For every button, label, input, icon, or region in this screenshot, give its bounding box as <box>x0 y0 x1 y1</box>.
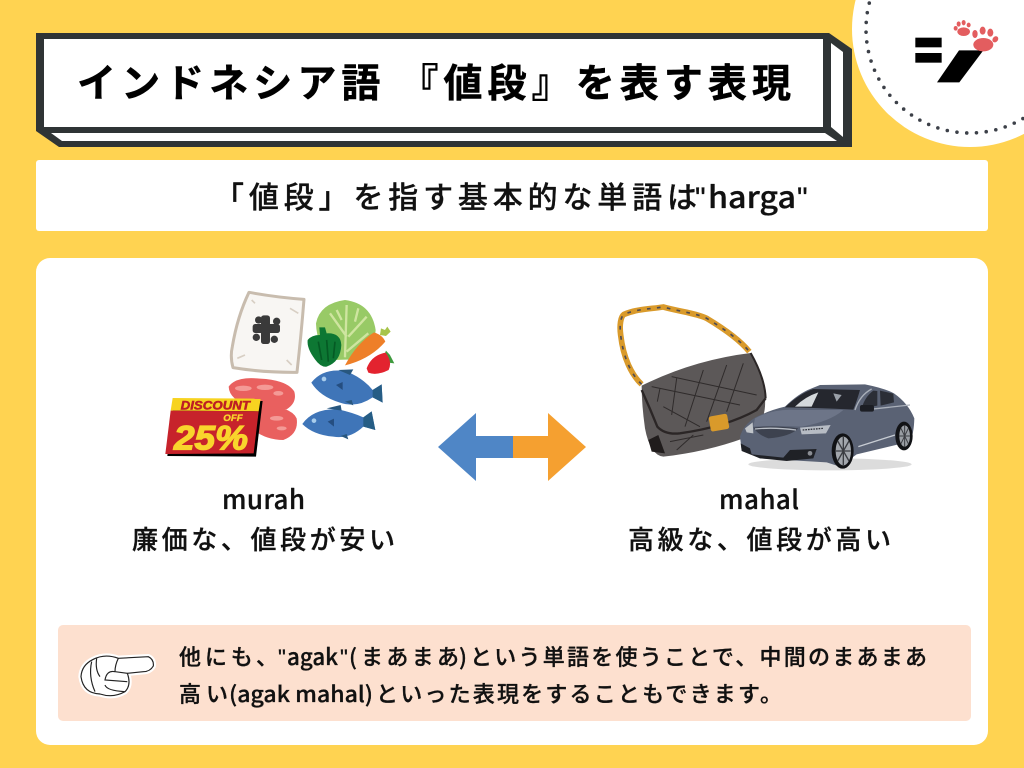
label: murah: murah <box>222 480 305 517</box>
icon: quilted handbag <box>642 353 766 457</box>
subtitle text: " <box>695 182 706 215</box>
icon: blue fish top <box>311 369 383 405</box>
icon: chain handle <box>620 307 749 384</box>
title frame <box>36 33 852 147</box>
note text: という単語を使うことで、中間のまあまあ <box>470 640 927 672</box>
icon: pointing hand <box>81 656 153 696</box>
illustration: luxury bag and car <box>620 307 914 470</box>
note text: といった表現をすることもできます。 <box>376 677 782 709</box>
illustration: cheap groceries with discount <box>165 292 394 457</box>
icon: rice bag <box>231 292 304 372</box>
icon: grey sedan <box>740 384 914 470</box>
note text <box>179 638 927 709</box>
icon: discount badge <box>165 398 263 457</box>
icon: green pepper <box>308 327 341 367</box>
note text: まあまあ <box>361 640 459 672</box>
arrow: murah versus mahal <box>438 413 586 481</box>
label: mahal <box>628 480 891 557</box>
icon: discount badge: DISCOUNT <box>181 398 252 412</box>
icon: blue fish bottom <box>302 405 375 439</box>
label: mahal meaning: 高級な、値段が高い <box>628 520 891 557</box>
note text: ) <box>459 640 467 672</box>
icon: discount badge: OFF <box>223 413 243 423</box>
note text: " <box>278 645 286 670</box>
icon: meat <box>229 378 297 440</box>
panel: main <box>36 258 988 745</box>
note text: (agak mahal) <box>229 677 373 709</box>
note text: agak <box>287 638 338 672</box>
label: murah meaning: 廉価な、値段が安い <box>132 520 395 557</box>
subtitle text: 「値段」を指す基本的な単語は <box>214 173 697 217</box>
title: インドネシア語 『値段』を表す表現 <box>77 53 791 109</box>
icon: carrot <box>345 327 391 365</box>
label: murah <box>132 480 395 557</box>
note text: ( <box>349 640 357 672</box>
subtitle text: harga <box>708 173 796 217</box>
subtitle text: " <box>797 182 808 215</box>
note text: 高い <box>179 677 228 709</box>
icon: strawberry <box>367 351 394 374</box>
icon: cabbage <box>316 300 376 360</box>
label: mahal: mahal <box>719 480 799 517</box>
callout: note <box>58 625 971 721</box>
panel: subtitle <box>36 160 988 231</box>
logo badge <box>852 0 1024 147</box>
note text: 他にも、 <box>179 640 278 672</box>
icon: discount badge: 25% <box>173 419 248 457</box>
note text: " <box>340 645 348 670</box>
